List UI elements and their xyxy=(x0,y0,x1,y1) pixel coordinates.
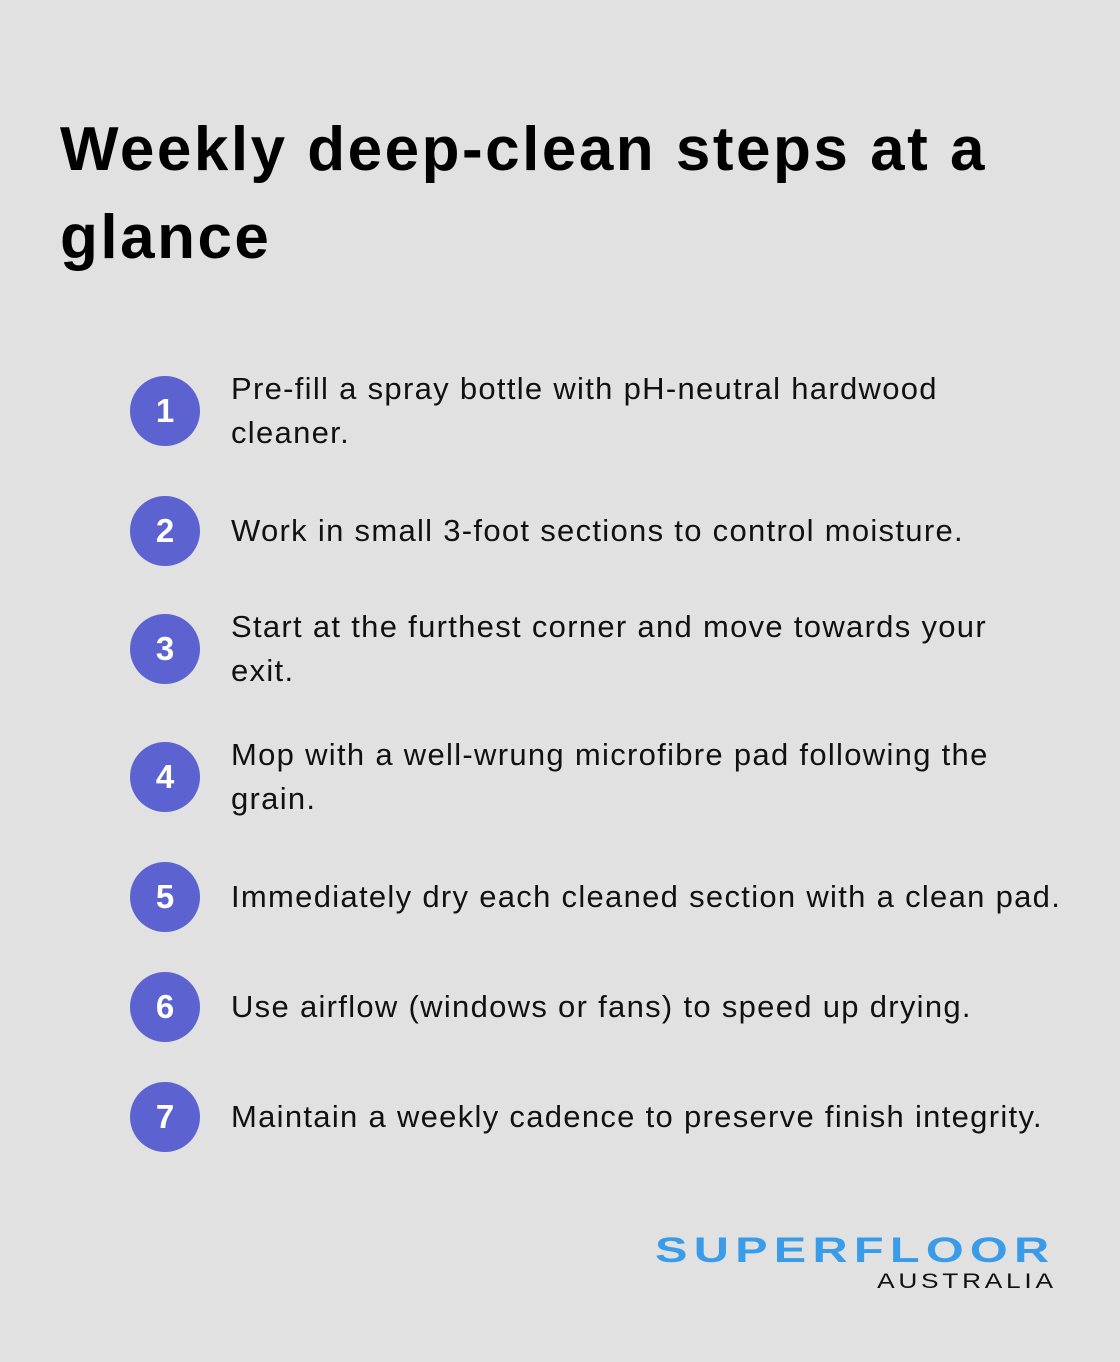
step 7 xyxy=(130,1082,1043,1152)
step 4: 4 xyxy=(156,758,174,795)
step 6: Use airflow (windows or fans) to speed up drying. xyxy=(231,989,972,1024)
step 6 xyxy=(130,972,972,1042)
step 7: 7 xyxy=(156,1098,174,1135)
step 5 xyxy=(130,862,1061,932)
logo xyxy=(655,1231,1057,1293)
step 3: 3 xyxy=(156,630,174,667)
step 3: Start at the furthest corner and move towards your exit. xyxy=(231,609,987,688)
logo: SUPERFLOOR xyxy=(655,1231,1055,1270)
step 7: Maintain a weekly cadence to preserve finish integrity. xyxy=(231,1099,1043,1134)
title: Weekly deep-clean steps at a glance xyxy=(60,115,987,272)
step 4: Mop with a well-wrung microfibre pad following the grain. xyxy=(231,737,989,816)
step 2: Work in small 3-foot sections to control moisture. xyxy=(231,513,964,548)
step 1: Pre-fill a spray bottle with pH-neutral hardwood cleaner. xyxy=(231,371,938,450)
logo: AUSTRALIA xyxy=(877,1270,1057,1293)
step 5: 5 xyxy=(156,878,174,915)
step 1: 1 xyxy=(156,392,174,429)
step 2: 2 xyxy=(156,512,174,549)
step 5: Immediately dry each cleaned section with a clean pad. xyxy=(231,879,1061,914)
step 2 xyxy=(130,496,964,566)
step 6: 6 xyxy=(156,988,174,1025)
